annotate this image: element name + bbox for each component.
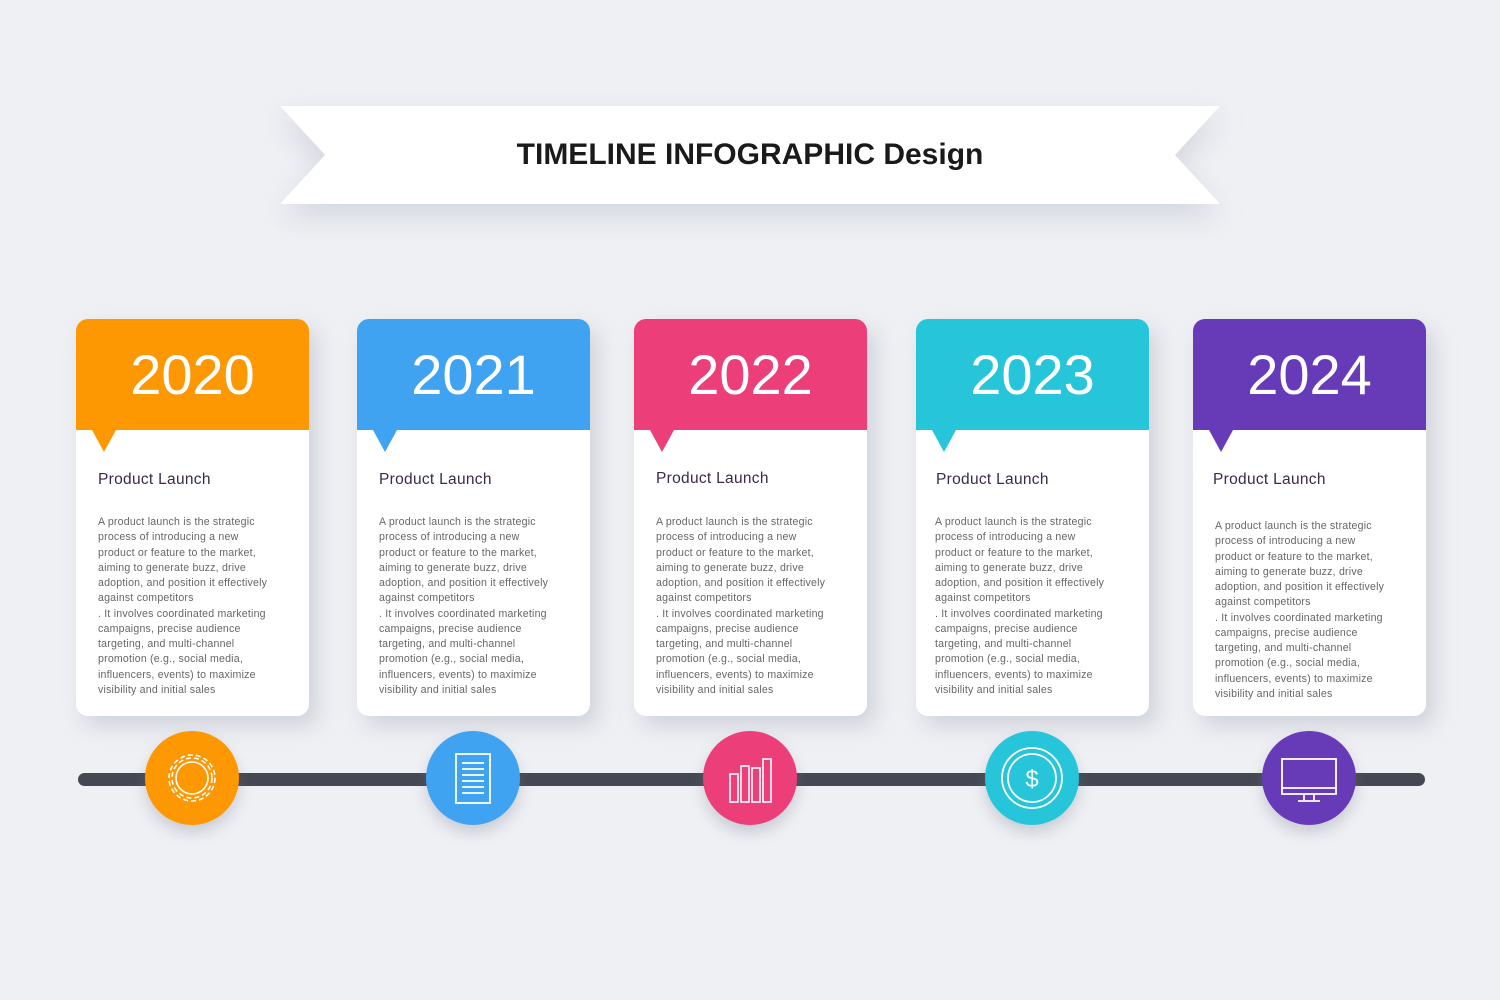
heading: Product Launch xyxy=(936,471,1049,488)
year 2022 xyxy=(634,319,867,430)
heading: Product Launch xyxy=(98,471,211,488)
text block: campaigns, precise audience xyxy=(379,623,522,635)
text block: product or feature to the market, xyxy=(379,546,537,558)
panel: 2022 xyxy=(634,319,867,716)
text block: adoption, and position it effectively xyxy=(935,577,1104,589)
heading: Product Launch xyxy=(656,470,769,487)
year 2020: 2020 xyxy=(130,343,255,406)
text block: influencers, events) to maximize xyxy=(379,668,537,680)
text block xyxy=(98,516,267,696)
text block: influencers, events) to maximize xyxy=(1215,672,1373,684)
text block: aiming to generate buzz, drive xyxy=(379,562,527,574)
text block: against competitors xyxy=(98,592,194,604)
panel: 2021 xyxy=(357,319,590,716)
text block: campaigns, precise audience xyxy=(98,623,241,635)
text block xyxy=(1215,520,1384,700)
text block: visibility and initial sales xyxy=(935,684,1052,696)
year 2023 xyxy=(916,319,1149,430)
year 2023: 2023 xyxy=(970,343,1095,406)
text block: aiming to generate buzz, drive xyxy=(935,562,1083,574)
year 2024 xyxy=(1193,319,1426,430)
text block: targeting, and multi-channel xyxy=(98,638,234,650)
text block xyxy=(379,516,548,696)
text block: product or feature to the market, xyxy=(98,546,256,558)
text block: A product launch is the strategic xyxy=(935,516,1092,528)
text block: visibility and initial sales xyxy=(98,684,215,696)
text block: promotion (e.g., social media, xyxy=(98,653,243,665)
text block: adoption, and position it effectively xyxy=(1215,581,1384,593)
icon: dollar coin xyxy=(985,731,1079,825)
year 2022: 2022 xyxy=(688,343,813,406)
text block: targeting, and multi-channel xyxy=(379,638,515,650)
text block: A product launch is the strategic xyxy=(379,516,536,528)
text block: influencers, events) to maximize xyxy=(98,668,256,680)
text block: campaigns, precise audience xyxy=(656,623,799,635)
text block: process of introducing a new xyxy=(935,531,1075,543)
text block: product or feature to the market, xyxy=(1215,550,1373,562)
timeline line xyxy=(78,773,1425,786)
text block: aiming to generate buzz, drive xyxy=(98,562,246,574)
text block: product or feature to the market, xyxy=(935,546,1093,558)
title: TIMELINE INFOGRAPHIC Design xyxy=(517,138,983,171)
panel: 2023 xyxy=(916,319,1149,716)
text block: . It involves coordinated marketing xyxy=(656,608,824,620)
year 2021: 2021 xyxy=(411,343,536,406)
text block: targeting, and multi-channel xyxy=(935,638,1071,650)
text block: promotion (e.g., social media, xyxy=(1215,657,1360,669)
text block: against competitors xyxy=(935,592,1031,604)
text block: promotion (e.g., social media, xyxy=(656,653,801,665)
text block: adoption, and position it effectively xyxy=(656,577,825,589)
text block: visibility and initial sales xyxy=(656,684,773,696)
text block: process of introducing a new xyxy=(379,531,519,543)
year 2020 xyxy=(76,319,309,430)
text block: campaigns, precise audience xyxy=(1215,627,1358,639)
heading: Product Launch xyxy=(1213,471,1326,488)
heading: Product Launch xyxy=(379,471,492,488)
text block: influencers, events) to maximize xyxy=(935,668,1093,680)
text block: process of introducing a new xyxy=(98,531,238,543)
text block: visibility and initial sales xyxy=(379,684,496,696)
text block xyxy=(656,516,825,696)
text block: . It involves coordinated marketing xyxy=(98,608,266,620)
year 2021 xyxy=(357,319,590,430)
panel: 2020 xyxy=(76,319,309,716)
text block: . It involves coordinated marketing xyxy=(379,608,547,620)
text block: against competitors xyxy=(656,592,752,604)
text block: . It involves coordinated marketing xyxy=(935,608,1103,620)
year 2024: 2024 xyxy=(1247,343,1372,406)
icon: document xyxy=(426,731,520,825)
text block xyxy=(935,516,1104,696)
text block: influencers, events) to maximize xyxy=(656,668,814,680)
text block: promotion (e.g., social media, xyxy=(379,653,524,665)
text block: against competitors xyxy=(1215,596,1311,608)
text block: aiming to generate buzz, drive xyxy=(1215,566,1363,578)
text block: A product launch is the strategic xyxy=(656,516,813,528)
text block: promotion (e.g., social media, xyxy=(935,653,1080,665)
icon: dollar coin: $ xyxy=(1025,766,1039,793)
text block: product or feature to the market, xyxy=(656,546,814,558)
text block: against competitors xyxy=(379,592,475,604)
text block: campaigns, precise audience xyxy=(935,623,1078,635)
text block: targeting, and multi-channel xyxy=(656,638,792,650)
text block: A product launch is the strategic xyxy=(1215,520,1372,532)
icon: bar chart xyxy=(703,731,797,825)
icon: monitor xyxy=(1262,731,1356,825)
text block: A product launch is the strategic xyxy=(98,516,255,528)
text block: targeting, and multi-channel xyxy=(1215,642,1351,654)
text block: . It involves coordinated marketing xyxy=(1215,612,1383,624)
text block: adoption, and position it effectively xyxy=(98,577,267,589)
panel: 2024 xyxy=(1193,319,1426,716)
text block: process of introducing a new xyxy=(1215,535,1355,547)
text block: process of introducing a new xyxy=(656,531,796,543)
text block: aiming to generate buzz, drive xyxy=(656,562,804,574)
text block: adoption, and position it effectively xyxy=(379,577,548,589)
icon: gear xyxy=(145,731,239,825)
banner xyxy=(280,106,1220,224)
text block: visibility and initial sales xyxy=(1215,688,1332,700)
